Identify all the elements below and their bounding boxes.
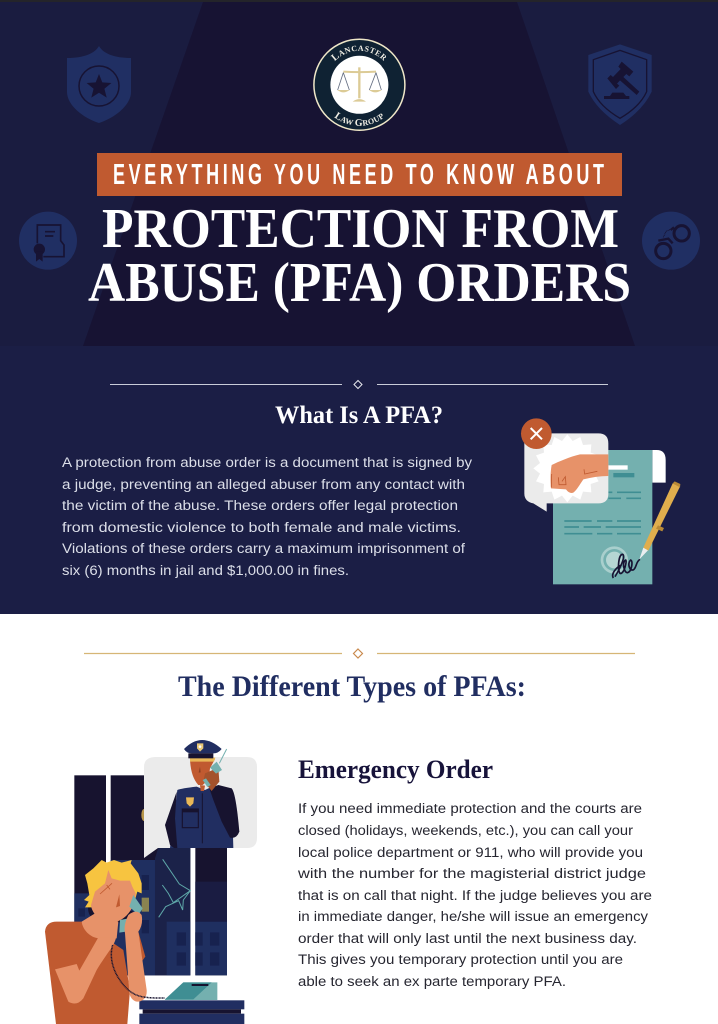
text block: definition: from domestic violence to both female and male victims. [62, 519, 461, 535]
logo: LAW GROUP [334, 112, 383, 126]
title [88, 198, 631, 314]
title: ABUSE (PFA) ORDERS [88, 252, 631, 314]
text block: emergency order: that is on call that night. If the judge believes you are [298, 887, 652, 903]
icon: police badge shield [67, 46, 131, 123]
panel: what is a PFA [0, 346, 718, 614]
text block: emergency order [297, 800, 652, 989]
icon: certificate circle [19, 212, 77, 270]
text block: definition: a judge, preventing an alleged abuser from any contact with [62, 476, 465, 492]
text block: definition: Violations of these orders carry a maximum imprisonment of [62, 540, 465, 556]
panel: header [0, 0, 718, 346]
speech bubble [144, 757, 257, 858]
heading: what is a PFA: What Is A PFA? [275, 402, 443, 429]
woman on phone [45, 860, 165, 1024]
icon: handcuffs circle [642, 212, 700, 270]
title: PROTECTION FROM [102, 198, 619, 260]
text block: emergency order: This gives you temporary protection until you are [298, 951, 623, 967]
illustration: signed document with fist [521, 418, 680, 584]
text block: emergency order: local police department or 911, who will provide you [298, 844, 643, 860]
text block: definition: the victim of the abuse. These orders offer legal protection [62, 497, 458, 513]
police officer [165, 740, 239, 848]
logo: LANCASTER [330, 46, 386, 62]
text block: emergency order: with the number for the magisterial district judge [297, 865, 646, 881]
illustration: caller and police officer [45, 740, 257, 1024]
text block: definition: six (6) months in jail and $1,000.00 in fines. [62, 562, 349, 578]
logo [313, 38, 406, 131]
panel: types of PFAs [45, 649, 652, 1024]
text block: emergency order: closed (holidays, weekends, etc.), you can call your [298, 822, 633, 838]
text block: definition [62, 454, 473, 578]
text block: definition: A protection from abuse order is a document that is signed by [62, 454, 473, 470]
subheading: emergency order: Emergency Order [298, 755, 493, 784]
text block: emergency order: able to seek an ex parte temporary PFA. [298, 973, 566, 989]
icon: gavel shield [588, 44, 652, 125]
phone desk [139, 982, 244, 1024]
heading: different types: The Different Types of PFAs: [178, 670, 526, 703]
text block: emergency order: If you need immediate protection and the courts are [298, 800, 642, 816]
window with city [74, 775, 227, 975]
text block: emergency order: in immediate danger, he/she will issue an emergency [298, 908, 649, 924]
text block: emergency order: order that will only last until the next business day. [298, 930, 637, 946]
banner: EVERYTHING YOU NEED TO KNOW ABOUT [113, 159, 604, 191]
